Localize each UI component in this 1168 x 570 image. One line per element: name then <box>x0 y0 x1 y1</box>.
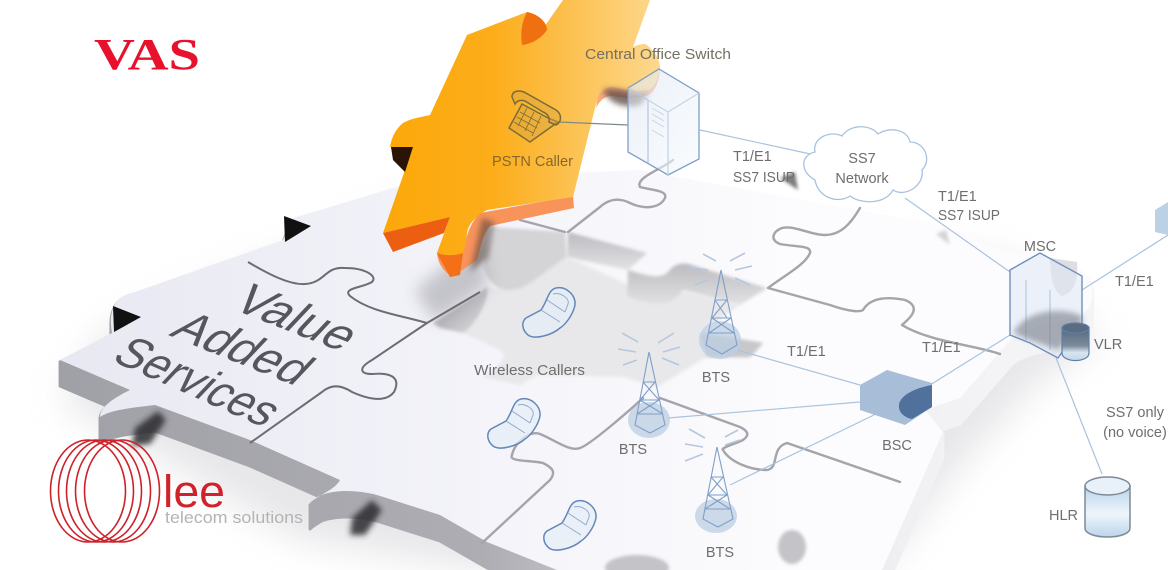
network labels: VLR <box>1094 337 1122 353</box>
network labels: Central Office Switch <box>585 47 731 63</box>
network labels: (no voice) <box>1103 425 1167 441</box>
network labels: BTS <box>706 545 734 561</box>
icon: wireless handset 3 <box>544 501 596 550</box>
icon: tower upper <box>690 253 752 359</box>
orange puzzle piece <box>383 0 660 277</box>
icon: partial device top right <box>1155 202 1168 235</box>
icon: wireless handset 1 <box>523 288 575 337</box>
puzzle heading: Value Added Services <box>103 276 371 435</box>
missing piece hollow <box>415 172 950 570</box>
network labels: T1/E1 <box>1115 274 1154 290</box>
network labels: BSC <box>882 438 912 454</box>
icon: BSC <box>860 370 932 425</box>
icon: MSC <box>1010 253 1082 358</box>
logo: lee telecom solutions: lee <box>163 466 225 517</box>
puzzle board <box>60 160 1100 570</box>
network labels: SS7 ISUP <box>938 208 1000 224</box>
network labels: Wireless Callers <box>474 363 585 379</box>
network labels: BTS <box>619 442 647 458</box>
icon: wireless handset 2 <box>488 399 540 448</box>
network labels: MSC <box>1024 239 1056 255</box>
network labels: T1/E1 <box>787 344 826 360</box>
puzzle heading: Value Added Services: Value <box>222 276 371 360</box>
icon: VLR database <box>1062 323 1089 360</box>
icon: central office switch <box>628 69 699 175</box>
logo: lee telecom solutions: telecom solutions <box>165 509 303 527</box>
network labels: T1/E1 <box>733 149 772 165</box>
puzzle heading: Value Added Services: Added <box>160 303 325 394</box>
network labels: PSTN Caller <box>492 154 573 170</box>
logo: lee telecom solutions <box>50 440 303 542</box>
label: Network: Network <box>835 171 889 187</box>
icon: SS7 cloud <box>804 127 927 202</box>
dark corners under tabs <box>132 411 382 535</box>
network labels: T1/E1 <box>922 340 961 356</box>
puzzle heading: Value Added Services: Services <box>103 328 294 435</box>
network links <box>559 122 1168 485</box>
icon: HLR database <box>1085 477 1130 537</box>
seams <box>248 262 480 323</box>
network labels: SS7 only <box>1106 405 1165 421</box>
icon: tower middle <box>618 333 680 438</box>
network labels <box>474 47 1167 561</box>
network labels: T1/E1 <box>938 189 977 205</box>
network labels: SS7 ISUP <box>733 170 795 186</box>
label: SS7: SS7 <box>848 151 876 167</box>
title: VAS: VAS <box>94 30 200 79</box>
network labels: BTS <box>702 370 730 386</box>
icon: tower lower <box>685 429 740 533</box>
notch shadows <box>113 216 311 332</box>
network labels: HLR <box>1049 508 1078 524</box>
icon: PSTN telephone <box>509 91 560 142</box>
